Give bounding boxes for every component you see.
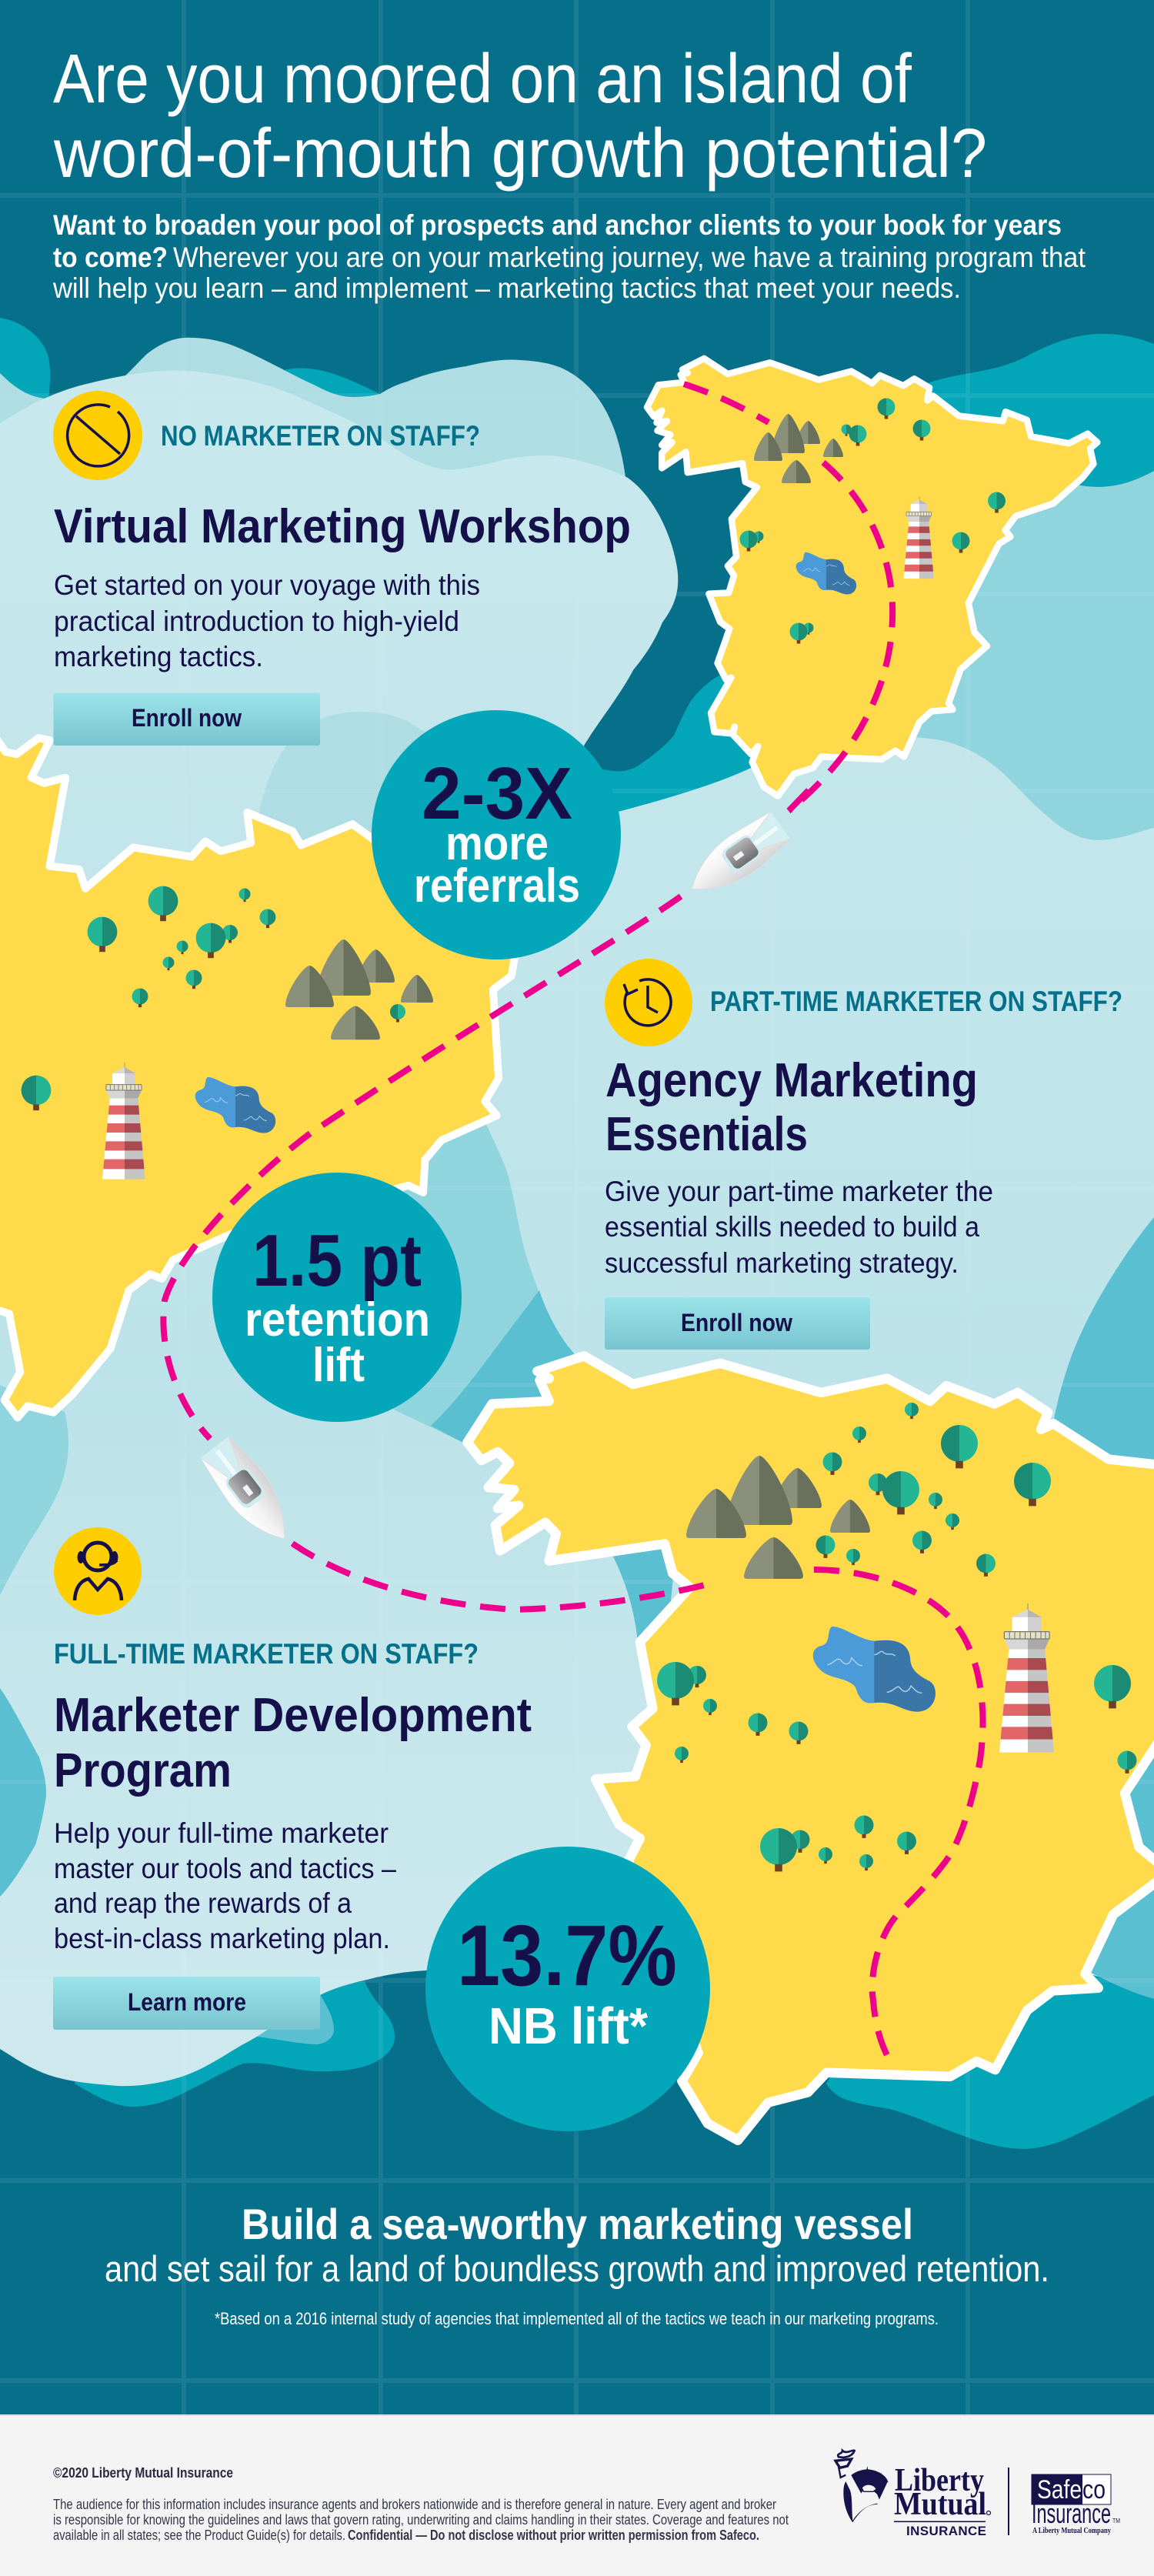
logo: Safeco Insurance: Insurance — [1032, 2498, 1111, 2529]
logo: Safeco Insurance: co — [1082, 2475, 1106, 2504]
copyright: ©2020 Liberty Mutual Insurance — [53, 2465, 233, 2481]
stat: 2-3X more referrals: 2-3X — [422, 752, 572, 835]
icon: boat lower — [197, 1433, 303, 1553]
heading: Agency Marketing — [605, 1054, 978, 1107]
intro text block: Want to broaden your pool of prospects and anchor clients to your book for years — [53, 209, 1062, 241]
heading — [54, 1689, 532, 1797]
panel: no marketer on staff — [53, 391, 631, 746]
description — [54, 1817, 396, 1954]
stat: 2-3X more referrals: referrals — [414, 859, 580, 913]
intro text block: to come? — [53, 242, 168, 273]
stat: 13.7% NB lift: 13.7% — [457, 1907, 677, 2004]
heading: Virtual Marketing Workshop — [54, 500, 631, 553]
panel: full-time marketer on staff — [53, 1527, 532, 2030]
description — [605, 1176, 993, 1279]
button — [53, 1977, 320, 2030]
icon: prohibited sign — [53, 391, 142, 480]
disclaimer: Confidential — Do not disclose without prior written permission from Safeco. — [348, 2528, 759, 2543]
description: successful marketing strategy. — [605, 1247, 959, 1279]
button: Learn more — [128, 1988, 246, 2016]
button — [605, 1297, 870, 1350]
footer panel — [0, 2414, 1154, 2576]
heading — [605, 1054, 978, 1161]
description: essential skills needed to build a — [605, 1211, 979, 1243]
logo: Liberty Mutual Insurance — [835, 2451, 991, 2538]
icon: statue of liberty — [835, 2451, 889, 2522]
panel: part-time marketer on staff — [605, 959, 1122, 1350]
disclaimer: The audience for this information includes insurance agents and brokers nationwide and is therefore general in nature. Every agent and broker — [53, 2497, 776, 2512]
closing message: Build a sea-worthy marketing vessel — [242, 2200, 913, 2248]
island: top right — [647, 359, 1097, 796]
dashed route — [163, 384, 983, 2067]
button: Enroll now — [132, 704, 242, 732]
closing message: and set sail for a land of boundless growth and improved retention. — [105, 2248, 1049, 2289]
logo: Safeco Insurance: Safe — [1037, 2475, 1082, 2504]
intro text block: Wherever you are on your marketing journey, we have a training program that — [173, 242, 1086, 273]
logo: Liberty Mutual Insurance: Mutual — [894, 2487, 986, 2522]
disclaimer: is responsible for knowing the guidelines and laws that govern rating, underwriting and claims handling in their states. Coverage and features not — [53, 2512, 789, 2528]
description: practical introduction to high-yield — [54, 606, 459, 637]
description: master our tools and tactics – — [54, 1853, 396, 1884]
description: Help your full-time marketer — [54, 1817, 389, 1849]
island: bottom right — [468, 1356, 1154, 2141]
logo: Safeco Insurance: TM — [1112, 2518, 1120, 2524]
icon: boat upper — [679, 808, 793, 907]
description: best-in-class marketing plan. — [54, 1923, 390, 1954]
subheading: NO MARKETER ON STAFF? — [161, 420, 480, 452]
divider — [1008, 2468, 1009, 2535]
logo: Liberty Mutual Insurance: Liberty — [895, 2463, 984, 2498]
heading: Essentials — [605, 1108, 808, 1161]
footnote: *Based on a 2016 internal study of agencies that implemented all of the tactics we teach in our marketing programs. — [215, 2309, 939, 2328]
logo: Safeco Insurance — [1032, 2474, 1120, 2535]
stat: 1.5 pt retention lift: retention — [245, 1293, 430, 1346]
subheading: FULL-TIME MARKETER ON STAFF? — [54, 1638, 479, 1670]
stat: 13.7% NB lift — [425, 1847, 710, 2131]
stat: 13.7% NB lift: NB lift* — [489, 1997, 649, 2055]
logo: Liberty Mutual Insurance: INSURANCE — [906, 2524, 986, 2538]
description: marketing tactics. — [54, 641, 263, 672]
button — [54, 692, 320, 746]
intro text block — [52, 209, 1086, 304]
stat: 1.5 pt retention lift: lift — [312, 1339, 365, 1392]
island details: left — [22, 886, 433, 1180]
button: Enroll now — [681, 1309, 792, 1336]
description — [54, 569, 480, 672]
island details: top right — [740, 399, 1006, 644]
heading: Marketer Development — [54, 1689, 532, 1742]
description: Get started on your voyage with this — [54, 569, 480, 601]
stat: 1.5 pt retention lift — [212, 1173, 462, 1422]
icon: headset person — [54, 1527, 142, 1615]
water shapes — [0, 318, 1154, 2149]
logo: Safeco Insurance: A Liberty Mutual Company — [1032, 2527, 1112, 2535]
title — [53, 41, 987, 192]
description: Give your part-time marketer the — [605, 1176, 993, 1207]
closing message — [105, 2200, 1049, 2289]
stat: 1.5 pt retention lift: 1.5 pt — [252, 1220, 422, 1302]
icon: clock — [605, 959, 692, 1046]
title: word-of-mouth growth potential? — [53, 115, 987, 192]
stat: 2-3X more referrals: more — [445, 817, 549, 870]
intro text block: will help you learn – and implement – marketing tactics that meet your needs. — [52, 272, 961, 304]
disclaimer: available in all states; see the Product Guide(s) for details. — [53, 2528, 345, 2543]
island: left — [0, 736, 515, 1417]
description: and reap the rewards of a — [54, 1887, 352, 1919]
island details: bottom right — [657, 1403, 1137, 1871]
heading: Program — [54, 1744, 232, 1797]
disclaimer — [53, 2497, 789, 2543]
title: Are you moored on an island of — [53, 41, 912, 118]
stat: 2-3X more referrals — [372, 710, 621, 959]
